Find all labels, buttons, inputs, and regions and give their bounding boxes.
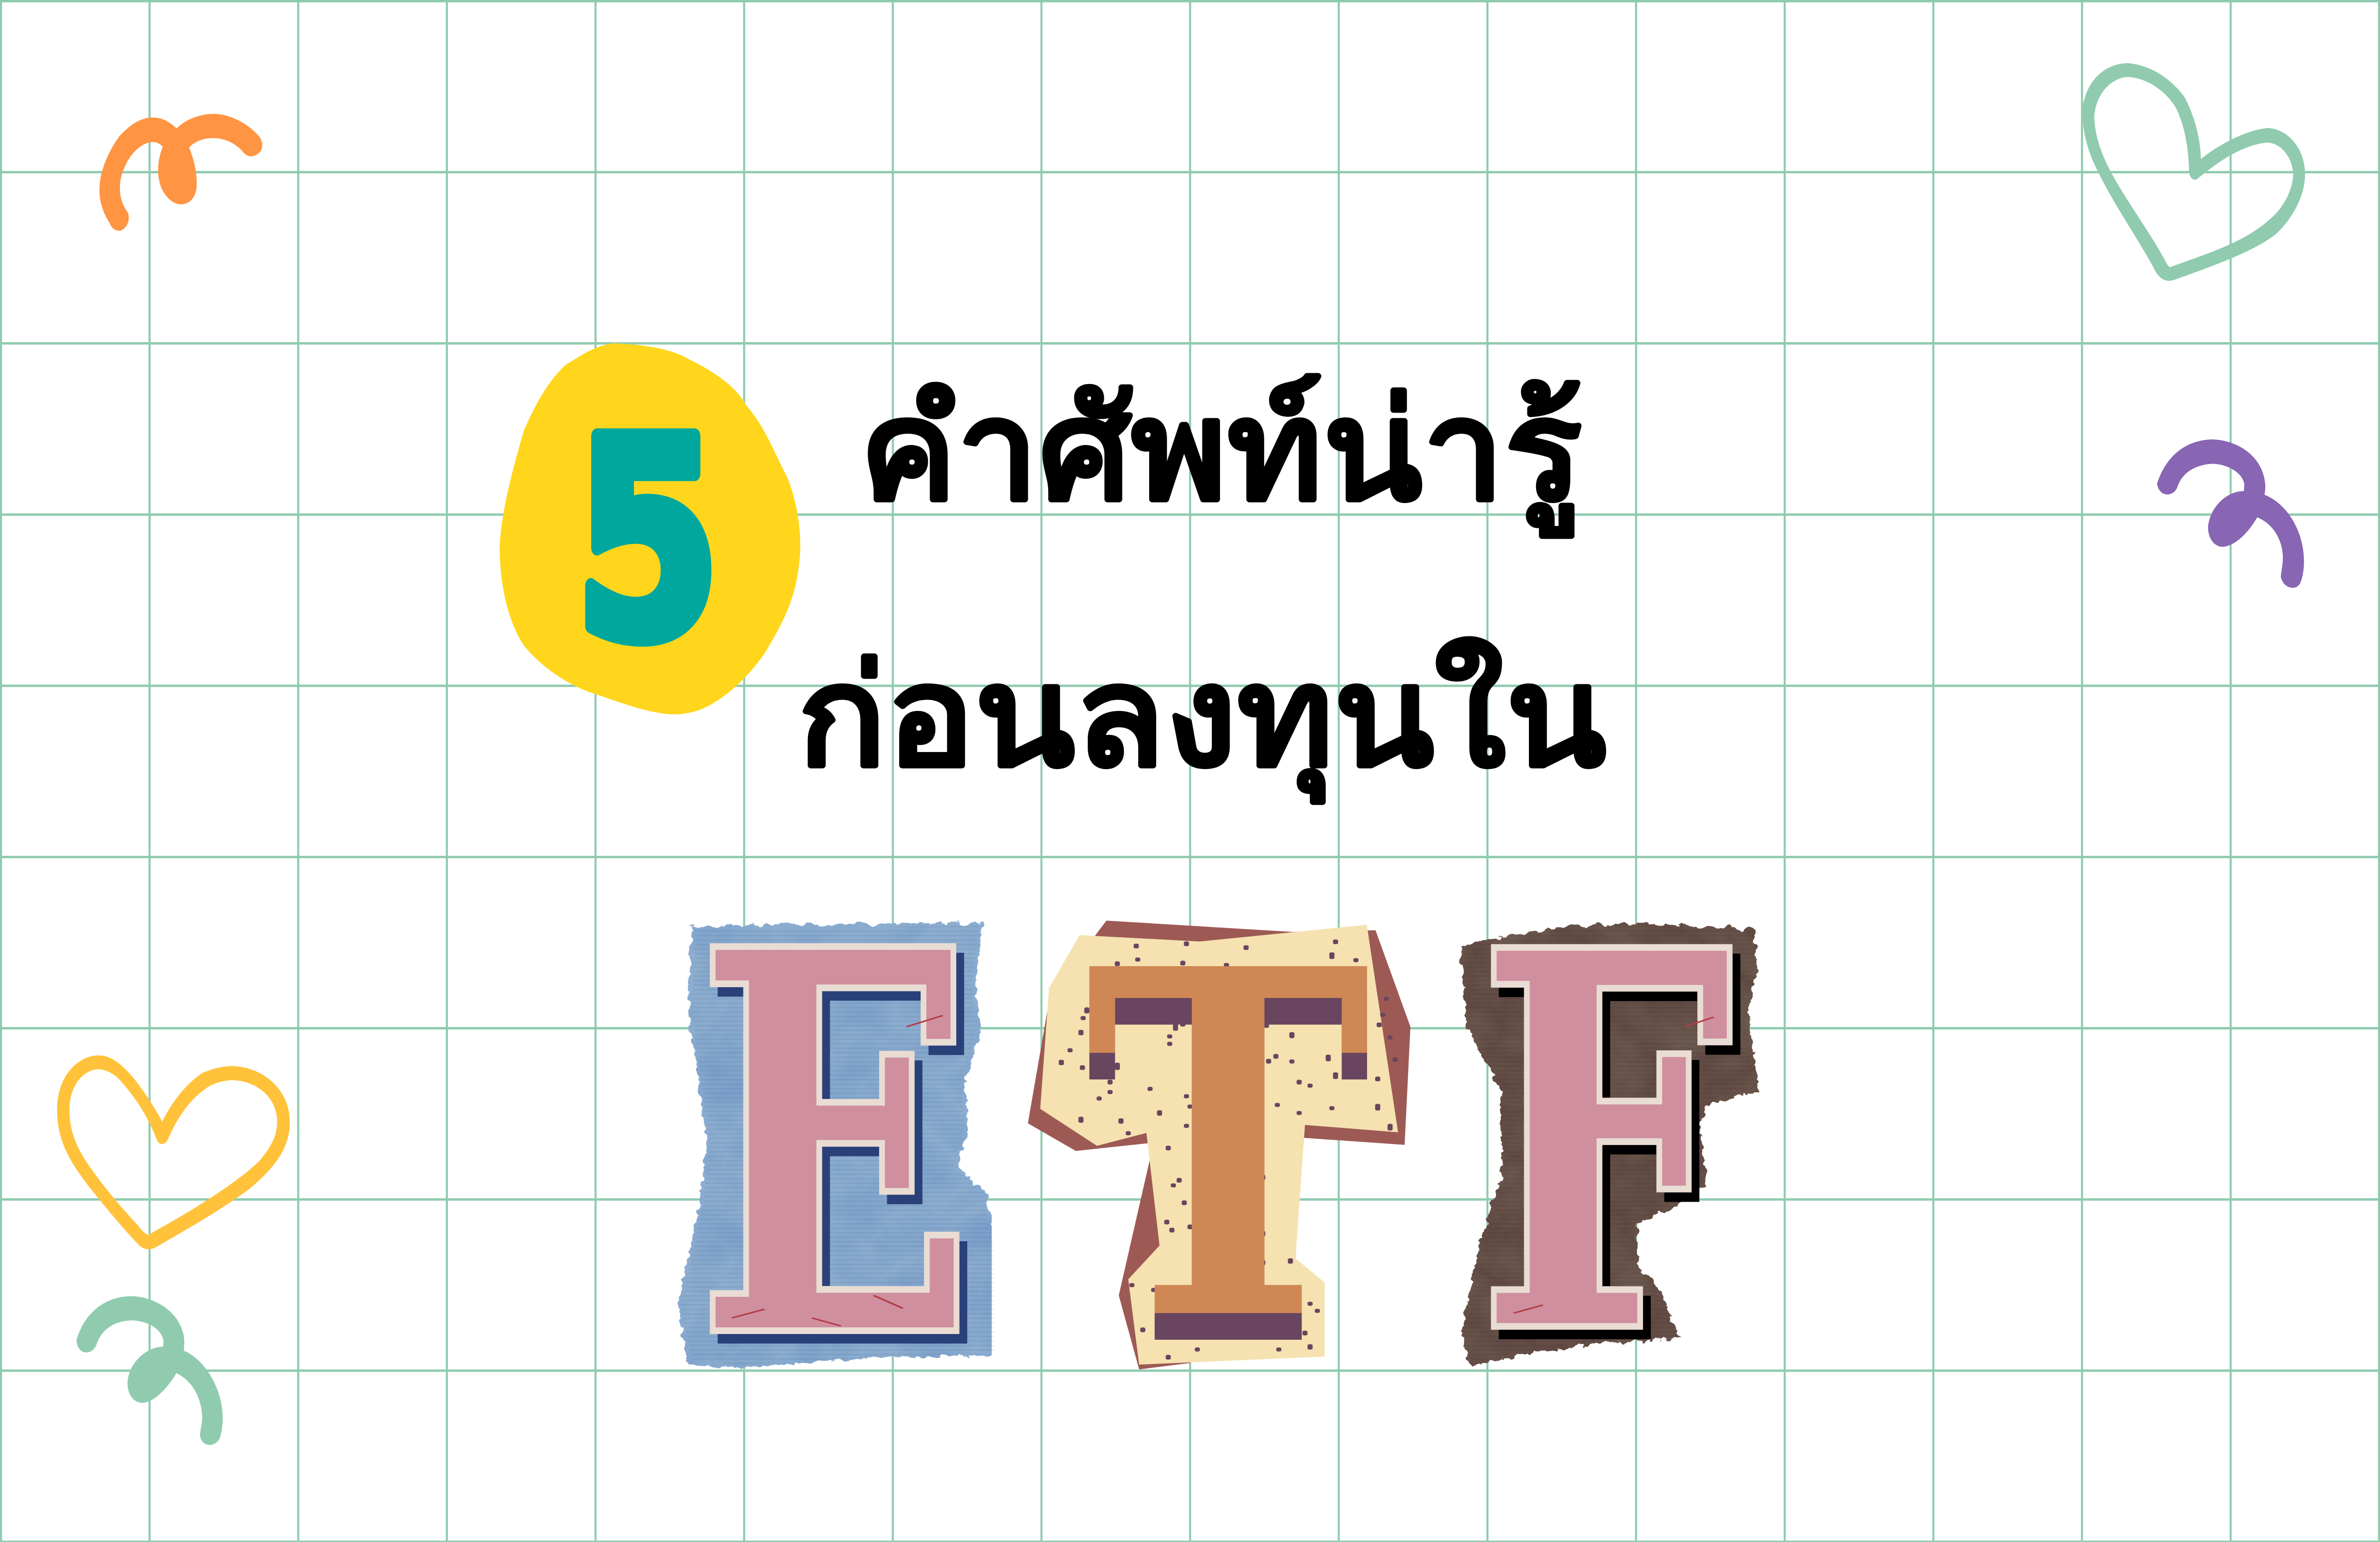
paper stripes	[681, 925, 995, 1364]
title line 1: คำศัพท์น่ารู้	[860, 372, 1583, 536]
icon: green swirl bottom left	[77, 1296, 223, 1445]
cream paper	[1040, 925, 1398, 1364]
number 5: 5	[575, 381, 720, 700]
title: two lines of Thai heading	[797, 372, 1606, 802]
letter T: T	[1085, 867, 1371, 1426]
scratches on E	[732, 1016, 943, 1326]
letter collage: F on brown torn paper	[1461, 843, 1759, 1443]
dark red backing paper	[1028, 920, 1410, 1369]
letter F: F	[1480, 843, 1732, 1443]
letter collage: E on blue torn paper	[677, 841, 1000, 1450]
yellow brush blob	[500, 343, 800, 714]
icon: orange swirl top left	[99, 114, 262, 231]
letter collage: T on cream paper	[1028, 867, 1410, 1426]
icon: green heart top right	[2082, 63, 2305, 281]
icon: yellow heart bottom left	[57, 1056, 290, 1249]
badge: yellow blob with number 5	[500, 343, 800, 714]
paper speckles	[1061, 940, 1395, 1358]
blue torn paper	[677, 922, 1000, 1368]
brown torn paper	[1461, 924, 1759, 1366]
title line 2: ก่อนลงทุนใน	[797, 638, 1606, 802]
letter E: E	[699, 841, 972, 1450]
scratches on F	[1514, 1017, 1714, 1313]
icon: purple swirl right	[2157, 439, 2304, 588]
paper stripes	[1464, 927, 1755, 1363]
